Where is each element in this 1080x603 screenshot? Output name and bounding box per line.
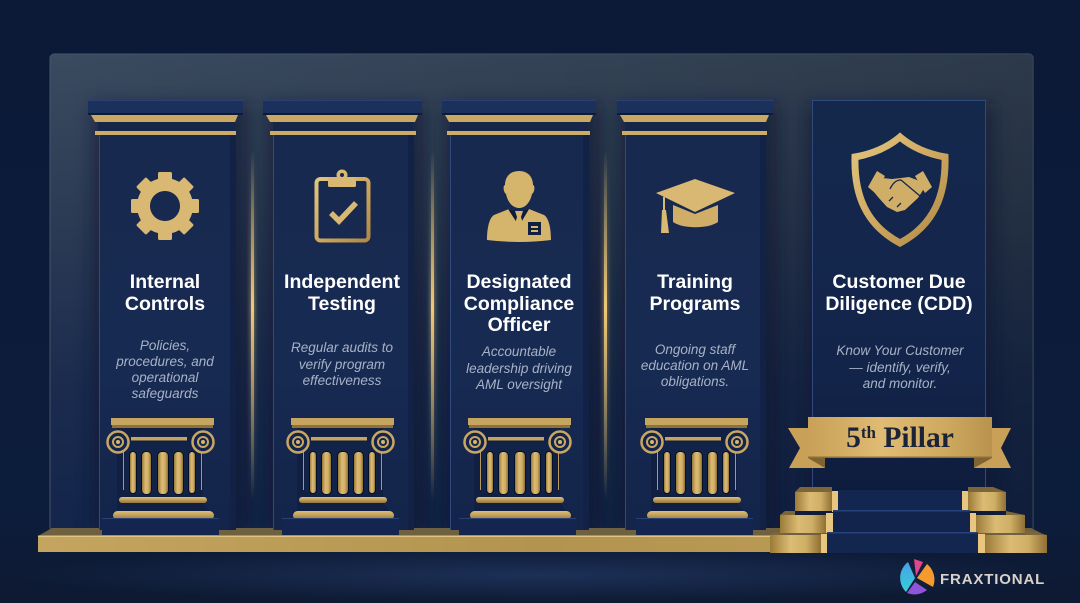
column capital xyxy=(459,418,576,535)
description: effectiveness xyxy=(303,373,382,388)
description: safeguards xyxy=(132,386,199,401)
logo: Fraxtional xyxy=(900,559,1045,594)
back panel xyxy=(50,54,1033,532)
stairs xyxy=(770,487,1047,553)
description: — identify, verify, xyxy=(848,360,951,375)
heading: Independent xyxy=(284,271,400,293)
icon: graduation cap xyxy=(656,179,735,233)
glow lines between pillars xyxy=(250,150,608,500)
description: and monitor. xyxy=(863,376,937,391)
pillar 4 shaft xyxy=(625,134,766,530)
heading: Diligence (CDD) xyxy=(825,293,973,315)
pillar 2 cornice xyxy=(263,100,422,135)
banner: 5th Pillar: Pillar xyxy=(876,422,954,454)
description: operational xyxy=(132,370,199,385)
pillar 3 cornice xyxy=(442,100,596,135)
icon: gear xyxy=(131,172,199,240)
column capital xyxy=(282,418,399,535)
banner: 5th Pillar: th xyxy=(861,423,877,442)
banner: 5th Pillar xyxy=(788,417,1011,468)
heading: Testing xyxy=(308,293,376,315)
description: education on AML xyxy=(641,358,749,373)
pillar 5: Customer Due Diligence xyxy=(812,100,986,492)
pillar 3 shaft xyxy=(450,134,589,530)
pillar 1 shaft xyxy=(99,134,236,530)
heading: Programs xyxy=(649,293,741,315)
description: Regular audits to xyxy=(291,340,394,355)
description: Policies, xyxy=(140,338,190,353)
badge and tie xyxy=(508,209,541,235)
heading: Officer xyxy=(488,314,551,336)
column capital xyxy=(636,418,753,535)
description: verify program xyxy=(299,357,385,372)
banner: 5th Pillar: 5 xyxy=(846,422,861,454)
pillar 1 cornice xyxy=(88,100,243,135)
heading: Training xyxy=(657,271,733,293)
pillar 2: Independent Testing xyxy=(263,100,422,535)
pillar 5 shaft xyxy=(812,100,986,492)
description: AML oversight xyxy=(475,377,563,392)
icon: officer xyxy=(487,171,551,242)
pillar 3: Designated Compliance Officer xyxy=(442,100,596,535)
description: obligations. xyxy=(661,374,729,389)
pillar 2 shaft xyxy=(273,134,414,530)
logo mark xyxy=(900,559,934,594)
floor reflection xyxy=(20,547,1060,603)
heading: Designated xyxy=(466,271,572,293)
icon: clipboard xyxy=(316,170,368,240)
pillar 4 cornice xyxy=(617,100,773,135)
description: Ongoing staff xyxy=(655,342,736,357)
pillar 1: Internal Controls xyxy=(88,100,243,535)
heading: Customer Due xyxy=(832,271,966,293)
heading: Internal xyxy=(130,271,200,293)
description: procedures, and xyxy=(115,354,214,369)
pillar shadows xyxy=(92,104,994,529)
icon: shield with handshake xyxy=(855,137,945,243)
description: Accountable xyxy=(481,344,556,359)
gold base platform xyxy=(38,528,1047,552)
heading: Compliance xyxy=(464,293,574,315)
heading: Controls xyxy=(125,293,205,315)
column capital xyxy=(102,418,219,535)
description: Know Your Customer xyxy=(836,343,964,358)
pillar 4: Training Programs xyxy=(617,100,773,535)
description: leadership driving xyxy=(466,361,572,376)
logo wordmark: FRAXTIONAL xyxy=(940,571,1045,588)
